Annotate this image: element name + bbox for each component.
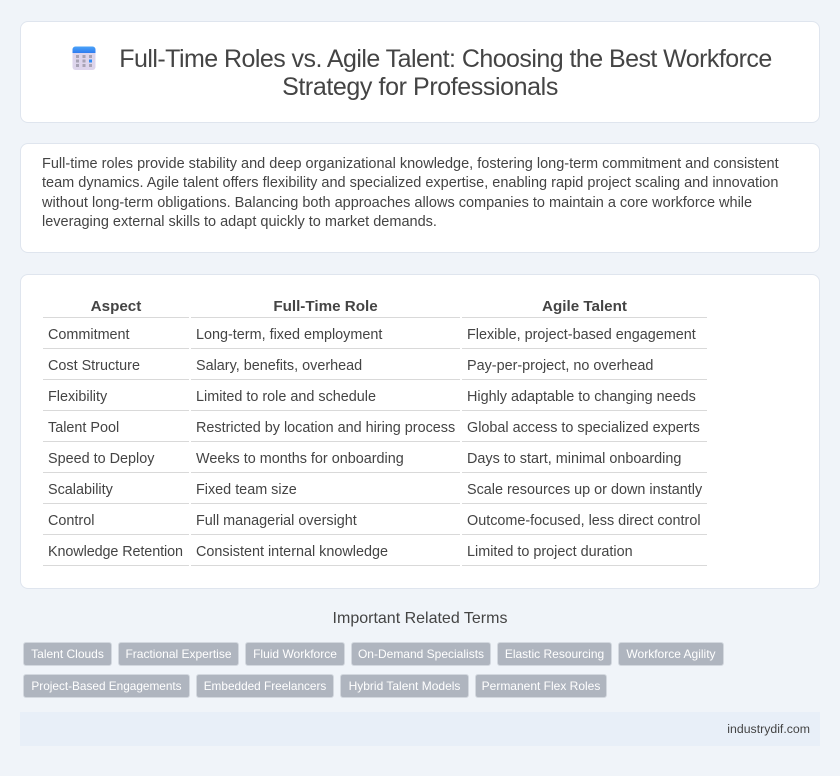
table header	[43, 298, 707, 318]
related terms heading: Important Related Terms	[333, 610, 507, 627]
row: talent pool	[43, 420, 707, 442]
row: talent pool: Restricted by location and hiring process	[196, 420, 455, 436]
icon: calendar	[72, 46, 96, 70]
row: flexibility: Highly adaptable to changing needs	[467, 389, 696, 405]
title: Full-Time Roles vs. Agile Talent: Choosing the Best Workforce	[119, 45, 772, 73]
table card	[20, 274, 820, 589]
row: commitment: Commitment	[48, 327, 130, 343]
row: speed to deploy: Days to start, minimal onboarding	[467, 451, 681, 467]
chip: Elastic Resourcing	[505, 647, 604, 661]
row: control: Control	[48, 513, 94, 529]
intro card	[20, 143, 820, 253]
row: talent pool: Talent Pool	[48, 420, 119, 436]
chip: Workforce Agility	[626, 647, 716, 661]
footer bar	[20, 712, 820, 746]
row: speed to deploy	[43, 451, 707, 473]
row: knowledge retention: Consistent internal knowledge	[196, 544, 388, 560]
chip	[118, 642, 239, 666]
row: scalability: Scale resources up or down instantly	[467, 482, 702, 498]
row: cost structure: Cost Structure	[48, 358, 140, 374]
row: cost structure: Salary, benefits, overhead	[196, 358, 362, 374]
row: cost structure	[43, 358, 707, 380]
chip: Permanent Flex Roles	[482, 679, 600, 693]
row: commitment	[43, 327, 707, 349]
title: Strategy for Professionals	[282, 73, 558, 101]
intro text: without long-term obligations. Balancing both approaches allows companies to maintain a core workforce while	[42, 194, 752, 210]
chip: Fractional Expertise	[125, 647, 232, 661]
row: cost structure: Pay-per-project, no overhead	[467, 358, 653, 374]
row: speed to deploy: Speed to Deploy	[48, 451, 154, 467]
row: knowledge retention: Limited to project duration	[467, 544, 633, 560]
chip	[245, 642, 345, 666]
chip	[23, 674, 190, 698]
row: knowledge retention	[43, 544, 707, 566]
footer source: industrydif.com	[727, 722, 810, 736]
chip	[497, 642, 612, 666]
chip	[23, 642, 112, 666]
chip: Talent Clouds	[31, 647, 104, 661]
row: commitment: Flexible, project-based engagement	[467, 327, 696, 343]
row: knowledge retention: Knowledge Retention	[48, 544, 183, 560]
intro text	[42, 156, 779, 230]
row: scalability	[43, 482, 707, 504]
chip	[196, 674, 334, 698]
intro text: Full-time roles provide stability and deep organizational knowledge, fostering long-term commitment and consistent	[42, 156, 779, 172]
row: flexibility: Limited to role and schedule	[196, 389, 376, 405]
row: commitment: Long-term, fixed employment	[196, 327, 382, 343]
chip: Embedded Freelancers	[204, 679, 326, 693]
row: flexibility: Flexibility	[48, 389, 107, 405]
chip: Project-Based Engagements	[31, 679, 182, 693]
intro text: team dynamics. Agile talent offers flexibility and specialized expertise, enabling rapid project scaling and innovation	[42, 175, 778, 191]
row: speed to deploy: Weeks to months for onboarding	[196, 451, 404, 467]
comparison table	[43, 298, 707, 566]
row: control: Full managerial oversight	[196, 513, 357, 529]
row: scalability: Fixed team size	[196, 482, 297, 498]
row: scalability: Scalability	[48, 482, 113, 498]
table header: Full-Time Role	[273, 298, 378, 315]
chip	[340, 674, 469, 698]
chip	[475, 674, 607, 698]
chip: Hybrid Talent Models	[349, 679, 460, 693]
table header: Aspect	[91, 298, 141, 315]
chip	[618, 642, 724, 666]
row: flexibility	[43, 389, 707, 411]
title	[119, 45, 772, 101]
intro text: leveraging external skills to adapt quickly to market demands.	[42, 214, 437, 230]
chip: Fluid Workforce	[253, 647, 337, 661]
chip	[351, 642, 491, 666]
row: control: Outcome-focused, less direct control	[467, 513, 701, 529]
header card	[20, 21, 820, 123]
related term chips	[23, 642, 724, 698]
row: talent pool: Global access to specialized experts	[467, 420, 700, 436]
table header: Agile Talent	[542, 298, 627, 315]
row: control	[43, 513, 707, 535]
chip: On-Demand Specialists	[358, 647, 484, 661]
